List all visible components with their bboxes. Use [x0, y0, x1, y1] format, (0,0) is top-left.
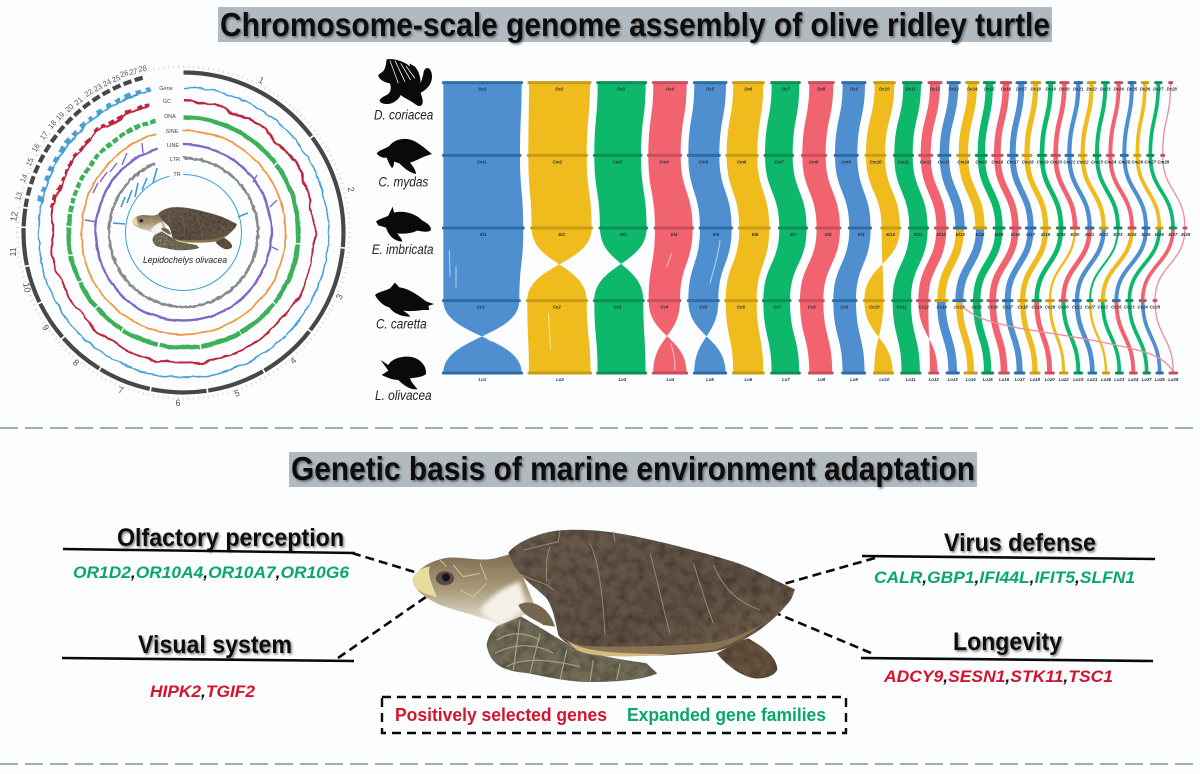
- chromosome numbers: 9: [40, 323, 51, 332]
- ribbon: chromosome 4: [648, 83, 693, 373]
- label: C. caretta: C. caretta: [376, 316, 427, 331]
- ribbon: chromosome 6: [726, 83, 769, 373]
- chromosome labels: columns 7 to 28: Ei15: [995, 232, 1004, 237]
- chromosome labels: columns 7 to 28: Lo9: [850, 377, 858, 382]
- chromosome labels: columns 7 to 28: Ei28: [1181, 232, 1191, 237]
- chromosome labels: columns 7 to 28: Cc14: [936, 305, 947, 310]
- TR ring: [126, 174, 242, 290]
- chromosome labels: columns 7 to 28: Cm18: [1022, 159, 1034, 164]
- label: L. olivacea: L. olivacea: [375, 388, 432, 403]
- chromosome caps: red: [800, 83, 1186, 373]
- callout: longevity: ADCY9,SESN1,STK11,TSC1: [883, 667, 1113, 686]
- chromosome caps: yellow: [864, 83, 1162, 373]
- chromosome labels: columns 7 to 28: Lo21: [1087, 377, 1098, 382]
- chromosome labels: columns 7 to 28: Cc13: [954, 305, 965, 310]
- chromosome labels: columns 7 to 28: Ei13: [956, 232, 965, 237]
- chromosome numbers: [8, 63, 356, 408]
- chromosome numbers: 11: [8, 247, 18, 257]
- ribbon: chromosome 2: [527, 83, 592, 373]
- chromosome caps: green: [594, 83, 647, 373]
- chromosome labels: columns 7 to 28: Dc19: [1045, 87, 1056, 92]
- chromosome labels: columns 7 to 28: Cm27: [1144, 159, 1157, 164]
- chromosome labels: columns 7 to 28: Dc25: [1127, 87, 1138, 92]
- chromosome numbers: 17: [38, 130, 50, 142]
- chromosome labels: columns 7 to 28: Dc26: [1140, 87, 1151, 92]
- ring labels: LTR: [170, 157, 180, 163]
- chromosome labels: columns 7 to 28: Ei18: [1041, 232, 1051, 237]
- chromosome labels: columns 7 to 28: Cc9: [840, 305, 849, 310]
- ribbon: chromosome 9: [833, 83, 871, 373]
- chromosome numbers: 16: [30, 142, 42, 154]
- species name: Lepidochelys olivacea: [143, 255, 227, 265]
- chromosome labels: columns 7 to 28: Ei14: [976, 232, 985, 237]
- chromosome labels: columns 7 to 28: Ei9: [858, 232, 865, 237]
- chromosome numbers: 10: [21, 282, 33, 293]
- ribbon: chromosome 10: [864, 83, 900, 373]
- ribbons: chromosomes 12 to 28, Ei to Cc: [923, 228, 1185, 301]
- ribbons: chromosomes 12 to 28, upper rows: [926, 83, 1185, 228]
- chromosome labels: columns 7 to 28: Ei21: [1085, 232, 1095, 237]
- chromosome labels: columns 7 to 28: Dc8: [817, 87, 826, 92]
- chromosome numbers: 3: [334, 292, 345, 301]
- chromosome labels: columns 7 to 28: Lo27: [1142, 377, 1152, 382]
- legend: Expanded gene families: [627, 705, 826, 725]
- ring labels: TR: [173, 172, 181, 178]
- chromosome labels: columns 7 to 28: Ei20: [1071, 232, 1080, 237]
- chromosome labels: columns 1 to 6: Lo6: [744, 377, 753, 382]
- chromosome labels: columns 1 to 6: Cc3: [613, 305, 622, 310]
- gene density ring: [36, 86, 330, 380]
- chromosome labels: columns 7 to 28: Dc12: [930, 87, 941, 92]
- chromosome labels: columns 7 to 28: Cm14: [957, 159, 970, 164]
- ribbon: chromosome 12, Cc to Lo twist: [918, 301, 938, 373]
- label: C. mydas: C. mydas: [378, 175, 428, 190]
- label: E. imbricata: E. imbricata: [372, 242, 434, 257]
- chromosome labels: columns 7 to 28: Lo24: [1128, 377, 1139, 382]
- chromosome labels: columns 7 to 28: Lo22: [1059, 377, 1069, 382]
- chromosome labels: columns 7 to 28: Lo14: [966, 377, 976, 382]
- ribbon: chromosome 1: [443, 83, 523, 373]
- chromosome labels: columns 7 to 28: Lo20: [1045, 377, 1055, 382]
- chromosome labels: columns 7 to 28: Cm24: [1104, 159, 1117, 164]
- callout: virus defense: [862, 529, 1155, 587]
- label: D. coriacea: D. coriacea: [374, 107, 434, 122]
- chromosome labels: columns 7 to 28: Lo8: [817, 377, 826, 382]
- chromosome labels: columns 7 to 28: Lo28: [1168, 377, 1179, 382]
- arrow: longevity to shell: [778, 614, 871, 653]
- ribbon: chromosome 5: [688, 83, 732, 373]
- chromosome numbers: 26: [119, 68, 130, 79]
- chromosome numbers: 27: [128, 66, 139, 77]
- callout: olfactory perception: Olfactory perception: [117, 524, 344, 552]
- chromosome labels: columns 1 to 6: Cc5: [699, 305, 708, 310]
- chromosome labels: columns 7 to 28: Lo13: [948, 377, 958, 382]
- chromosome labels: columns 1 to 6: Lo2: [556, 377, 564, 382]
- chromosome labels: columns 7 to 28: Dc14: [967, 87, 978, 92]
- callout: virus defense: Virus defense: [944, 529, 1096, 557]
- chromosome labels: columns 1 to 6: Cm4: [659, 159, 669, 164]
- chromosome labels: columns 7 to 28: Cm16: [991, 159, 1004, 164]
- chromosome labels: columns 1 to 6: Ei6: [752, 232, 759, 237]
- chromosome labels: columns 1 to 6: Dc3: [617, 87, 626, 92]
- chromosome labels: columns 7 to 28: Ei23: [1114, 232, 1123, 237]
- chromosome labels: columns 7 to 28: Cc28: [1150, 305, 1161, 310]
- chromosome labels: columns 7 to 28: Dc28: [1166, 87, 1177, 92]
- chromosome labels: columns 7 to 28: Ei24: [1128, 232, 1137, 237]
- chromosome labels: columns 1 to 6: Dc6: [744, 87, 753, 92]
- chromosome numbers: 13: [13, 191, 24, 202]
- chromosome labels: columns 7 to 28: Ei7: [790, 232, 797, 237]
- chromosome caps: red: [648, 83, 693, 373]
- LTR ring: [109, 158, 258, 307]
- chromosome numbers: 18: [46, 118, 58, 130]
- chromosome labels: columns 1 to 6: Lo1: [478, 377, 487, 382]
- chromosome labels: columns 7 to 28: Lo26: [1101, 377, 1112, 382]
- chromosome labels: columns 7 to 28: [773, 87, 1191, 382]
- chromosome numbers: 25: [111, 73, 122, 84]
- chromosome labels: columns 7 to 28: Dc24: [1113, 87, 1124, 92]
- chromosome labels: columns 7 to 28: Cm9: [841, 159, 851, 164]
- chromosome labels: columns 7 to 28: Cc17: [1002, 305, 1013, 310]
- chromosome labels: columns 7 to 28: Dc7: [782, 87, 791, 92]
- chromosome labels: columns 1 to 6: Cm1: [477, 159, 487, 164]
- arrow: visual to eye: [338, 590, 436, 658]
- chromosome labels: columns 7 to 28: Cm7: [774, 159, 784, 164]
- DNA transposon ring: [68, 118, 298, 348]
- silhouette: E. imbricata: [376, 207, 431, 242]
- ring labels: SINE: [166, 129, 179, 135]
- callout: visual system: HIPK2,TGIF2: [150, 682, 256, 701]
- chromosome labels: columns 7 to 28: Cc24: [1137, 305, 1148, 310]
- chromosome labels: columns 7 to 28: Ei27: [1169, 232, 1178, 237]
- chromosome numbers: 1: [257, 75, 266, 86]
- chromosome numbers: 22: [83, 87, 95, 99]
- heading: genetic basis: Genetic basis of marine environment adaptation: [291, 450, 975, 487]
- chromosome labels: columns 1 to 6: Cc4: [660, 305, 669, 310]
- chromosome labels: columns 7 to 28: Cm25: [1118, 159, 1131, 164]
- callout: virus defense: CALR,GBP1,IFI44L,IFIT5,SLFN1: [874, 568, 1135, 587]
- chart: synteny ribbons, chromosomes 7 to 28: [763, 83, 1191, 382]
- outer chromosome ring: [24, 72, 344, 392]
- main turtle photo: [413, 530, 795, 682]
- chromosome labels: columns 7 to 28: Cc20: [1058, 305, 1069, 310]
- chromosome caps: blue: [833, 83, 1162, 373]
- centre turtle photo: [132, 207, 237, 250]
- chromosome numbers: 23: [92, 82, 104, 94]
- chromosome labels: columns 7 to 28: Dc21: [1073, 87, 1084, 92]
- chromosome labels: columns 7 to 28: Lo23: [1114, 377, 1125, 382]
- callout: visual system: [62, 631, 354, 701]
- chromosome labels: columns 1 to 6: [477, 87, 759, 382]
- chromosome labels: columns 7 to 28: Lo15: [983, 377, 993, 382]
- chromosome labels: columns 7 to 28: Ei16: [1011, 232, 1020, 237]
- chromosome labels: columns 7 to 28: Dc15: [984, 87, 995, 92]
- chromosome labels: columns 7 to 28: Cc26: [1045, 305, 1056, 310]
- chromosome labels: columns 7 to 28: Cc18: [1017, 305, 1028, 310]
- chart: synteny ribbons, chromosomes 1 to 6: [443, 83, 769, 382]
- chromosome labels: columns 1 to 6: Ei3: [620, 232, 627, 237]
- chromosome numbers: 15: [24, 156, 36, 168]
- chromosome numbers: 24: [101, 77, 113, 89]
- chromosome labels: columns 7 to 28: Cc22: [1097, 305, 1108, 310]
- chromosome labels: columns 7 to 28: Cm10: [870, 159, 882, 164]
- chromosome labels: columns 7 to 28: Ei11: [914, 232, 923, 237]
- ring labels: Gene: [159, 86, 173, 92]
- chromosome labels: columns 7 to 28: Cm28: [1157, 159, 1170, 164]
- chromosome labels: columns 7 to 28: Lo11: [906, 377, 916, 382]
- chromosome labels: columns 7 to 28: Cm17: [1007, 159, 1019, 164]
- chromosome labels: columns 7 to 28: Cm12: [920, 159, 932, 164]
- chromosome labels: columns 7 to 28: Cc19: [1031, 305, 1042, 310]
- chromosome numbers: 5: [233, 388, 241, 399]
- ribbon: chromosome 11: [893, 83, 928, 373]
- chromosome labels: columns 1 to 6: Dc5: [706, 87, 715, 92]
- chromosome labels: columns 7 to 28: Ei22: [1099, 232, 1109, 237]
- chromosome labels: columns 7 to 28: Cm20: [1050, 159, 1062, 164]
- chromosome numbers: 19: [54, 110, 66, 122]
- title: top heading: Chromosome-scale genome assembly of olive ridley turtle: [220, 6, 1050, 43]
- chromosome labels: columns 1 to 6: Lo4: [666, 377, 675, 382]
- divider: lower: [0, 763, 1200, 765]
- chromosome labels: columns 1 to 6: Dc2: [555, 87, 564, 92]
- chromosome labels: columns 1 to 6: Cm6: [737, 159, 747, 164]
- chromosome labels: columns 7 to 28: Cm21: [1063, 159, 1076, 164]
- chromosome labels: columns 7 to 28: Cc23: [1124, 305, 1135, 310]
- chromosome labels: columns 7 to 28: Dc20: [1059, 87, 1070, 92]
- callout: longevity: [861, 628, 1153, 686]
- chromosome labels: columns 1 to 6: Cc2: [553, 305, 561, 310]
- chromosome numbers: 14: [18, 173, 29, 184]
- chromosome labels: columns 7 to 28: Lo17: [1015, 377, 1025, 382]
- chromosome numbers: 4: [288, 355, 298, 366]
- silhouette: C. caretta: [375, 283, 434, 317]
- chromosome labels: columns 1 to 6: Ei2: [558, 232, 566, 237]
- chromosome numbers: 2: [346, 186, 356, 193]
- chromosome labels: columns 1 to 6: Cm5: [699, 159, 709, 164]
- chromosome labels: columns 7 to 28: Cc10: [869, 305, 880, 310]
- chromosome labels: columns 1 to 6: Lo3: [618, 377, 627, 382]
- chromosome numbers: 6: [175, 398, 181, 408]
- chromosome labels: columns 7 to 28: Dc9: [850, 87, 859, 92]
- legend: Positively selected genes: [395, 705, 607, 725]
- GC content ring: [52, 100, 316, 364]
- chromosome labels: columns 1 to 6: Cc1: [477, 305, 485, 310]
- chromosome labels: columns 7 to 28: Cc25: [1111, 305, 1122, 310]
- chromosome labels: columns 7 to 28: Ei17: [1026, 232, 1036, 237]
- ring labels: GC: [163, 99, 171, 105]
- chromosome labels: columns 7 to 28: Ei8: [825, 232, 832, 237]
- chromosome labels: columns 7 to 28: Cc11: [897, 305, 907, 310]
- chromosome labels: columns 1 to 6: Ei4: [671, 232, 678, 237]
- chromosome labels: columns 1 to 6: Cm3: [613, 159, 623, 164]
- chromosome labels: columns 7 to 28: Cm23: [1091, 159, 1103, 164]
- ring labels: DNA: [164, 114, 176, 120]
- chromosome labels: columns 7 to 28: Lo7: [782, 377, 790, 382]
- chromosome labels: columns 7 to 28: Cm22: [1077, 159, 1089, 164]
- chromosome labels: columns 7 to 28: Lo16: [999, 377, 1010, 382]
- chromosome labels: columns 7 to 28: Dc23: [1100, 87, 1111, 92]
- arrow: olfactory to head: [352, 553, 418, 573]
- SINE ring: [82, 130, 286, 334]
- chromosome labels: columns 7 to 28: Cc16: [987, 305, 998, 310]
- ribbon: chromosome 8: [800, 83, 840, 373]
- chart: circular genome plot: [8, 63, 356, 408]
- chromosome labels: columns 7 to 28: Cc15: [971, 305, 982, 310]
- chromosome labels: columns 1 to 6: Cc6: [737, 305, 746, 310]
- chromosome labels: columns 1 to 6: Cm2: [553, 159, 563, 164]
- chromosome numbers: 7: [117, 385, 124, 396]
- chromosome labels: columns 7 to 28: Dc18: [1030, 87, 1041, 92]
- chromosome labels: columns 7 to 28: Cm13: [938, 159, 950, 164]
- chromosome labels: columns 7 to 28: Lo18: [1030, 377, 1041, 382]
- chromosome labels: columns 7 to 28: Ei10: [886, 232, 896, 237]
- callout: visual system: Visual system: [138, 631, 292, 659]
- species silhouettes and names: [372, 59, 434, 403]
- chromosome numbers: 12: [8, 211, 20, 222]
- chromosome labels: columns 7 to 28: Cm15: [975, 159, 988, 164]
- chromosome labels: columns 1 to 6: Lo5: [706, 377, 714, 382]
- chromosome labels: columns 7 to 28: Ei26: [1155, 232, 1164, 237]
- chromosome labels: columns 7 to 28: Cm11: [898, 159, 910, 164]
- chromosome labels: columns 7 to 28: Cm19: [1037, 159, 1049, 164]
- legend: [382, 697, 846, 733]
- chromosome labels: columns 7 to 28: Dc13: [948, 87, 959, 92]
- chromosome labels: columns 1 to 6: Dc4: [666, 87, 675, 92]
- chromosome labels: columns 7 to 28: Ei19: [1057, 232, 1066, 237]
- chromosome labels: columns 1 to 6: Ei5: [713, 232, 720, 237]
- ribbon: chromosome 7: [763, 83, 807, 373]
- chromosome labels: columns 7 to 28: Lo19: [1073, 377, 1084, 382]
- divider: upper: [0, 427, 1200, 429]
- silhouette: D. coriacea: [378, 59, 432, 106]
- chromosome labels: columns 7 to 28: Cm26: [1131, 159, 1144, 164]
- TR spikes: [113, 168, 248, 224]
- chromosome numbers: 28: [138, 63, 147, 74]
- inner strands: [449, 240, 720, 370]
- silhouette: C. mydas: [377, 139, 432, 174]
- chromosome labels: columns 7 to 28: Cc21: [1072, 305, 1083, 310]
- chromosome numbers: 20: [63, 102, 75, 114]
- chromosome labels: columns 7 to 28: Lo10: [879, 377, 890, 382]
- chromosome labels: columns 7 to 28: Lo25: [1155, 377, 1165, 382]
- callout: longevity: Longevity: [953, 628, 1062, 656]
- chromosome labels: columns 1 to 6: Ei1: [480, 232, 487, 237]
- chromosome labels: columns 7 to 28: Dc11: [906, 87, 916, 92]
- ring labels: [159, 86, 181, 178]
- LINE spikes: [85, 143, 278, 250]
- chromosome numbers: 21: [72, 95, 85, 107]
- chromosome labels: columns 7 to 28: Ei25: [1142, 232, 1151, 237]
- chromosome labels: columns 7 to 28: Dc17: [1016, 87, 1027, 92]
- chromosome labels: columns 7 to 28: Dc16: [1001, 87, 1012, 92]
- arrow: virus defense to shell: [780, 558, 875, 585]
- chromosome caps: blue: [443, 83, 732, 373]
- chromosome numbers: 8: [71, 357, 81, 368]
- chromosome labels: columns 1 to 6: Dc1: [478, 87, 487, 92]
- LINE ring: [96, 144, 272, 320]
- chromosome labels: columns 7 to 28: Dc10: [879, 87, 890, 92]
- chromosome labels: columns 7 to 28: Cc27: [1085, 305, 1096, 310]
- chromosome caps: yellow: [527, 83, 769, 373]
- callout: olfactory perception: [63, 524, 355, 582]
- ribbon: chromosome 3: [594, 83, 647, 373]
- chromosome labels: columns 7 to 28: Cm8: [809, 159, 819, 164]
- ribbons: chromosomes 13 to 28, Cc to Lo: [941, 301, 1173, 373]
- chromosome labels: columns 7 to 28: Lo12: [929, 377, 939, 382]
- chromosome labels: columns 7 to 28: Dc22: [1086, 87, 1097, 92]
- chromosome labels: columns 7 to 28: Cc8: [808, 305, 816, 310]
- chromosome labels: columns 7 to 28: Cc7: [773, 305, 782, 310]
- chromosome labels: columns 7 to 28: Ei12: [937, 232, 946, 237]
- callout: olfactory perception: OR1D2,OR10A4,OR10A7,OR10G6: [73, 563, 350, 582]
- chromosome labels: columns 7 to 28: Cc12: [918, 305, 929, 310]
- chromosome caps: green: [763, 83, 1176, 373]
- silhouette: L. olivacea: [381, 357, 426, 389]
- chromosome labels: columns 7 to 28: Dc27: [1153, 87, 1164, 92]
- ring labels: LINE: [167, 143, 179, 149]
